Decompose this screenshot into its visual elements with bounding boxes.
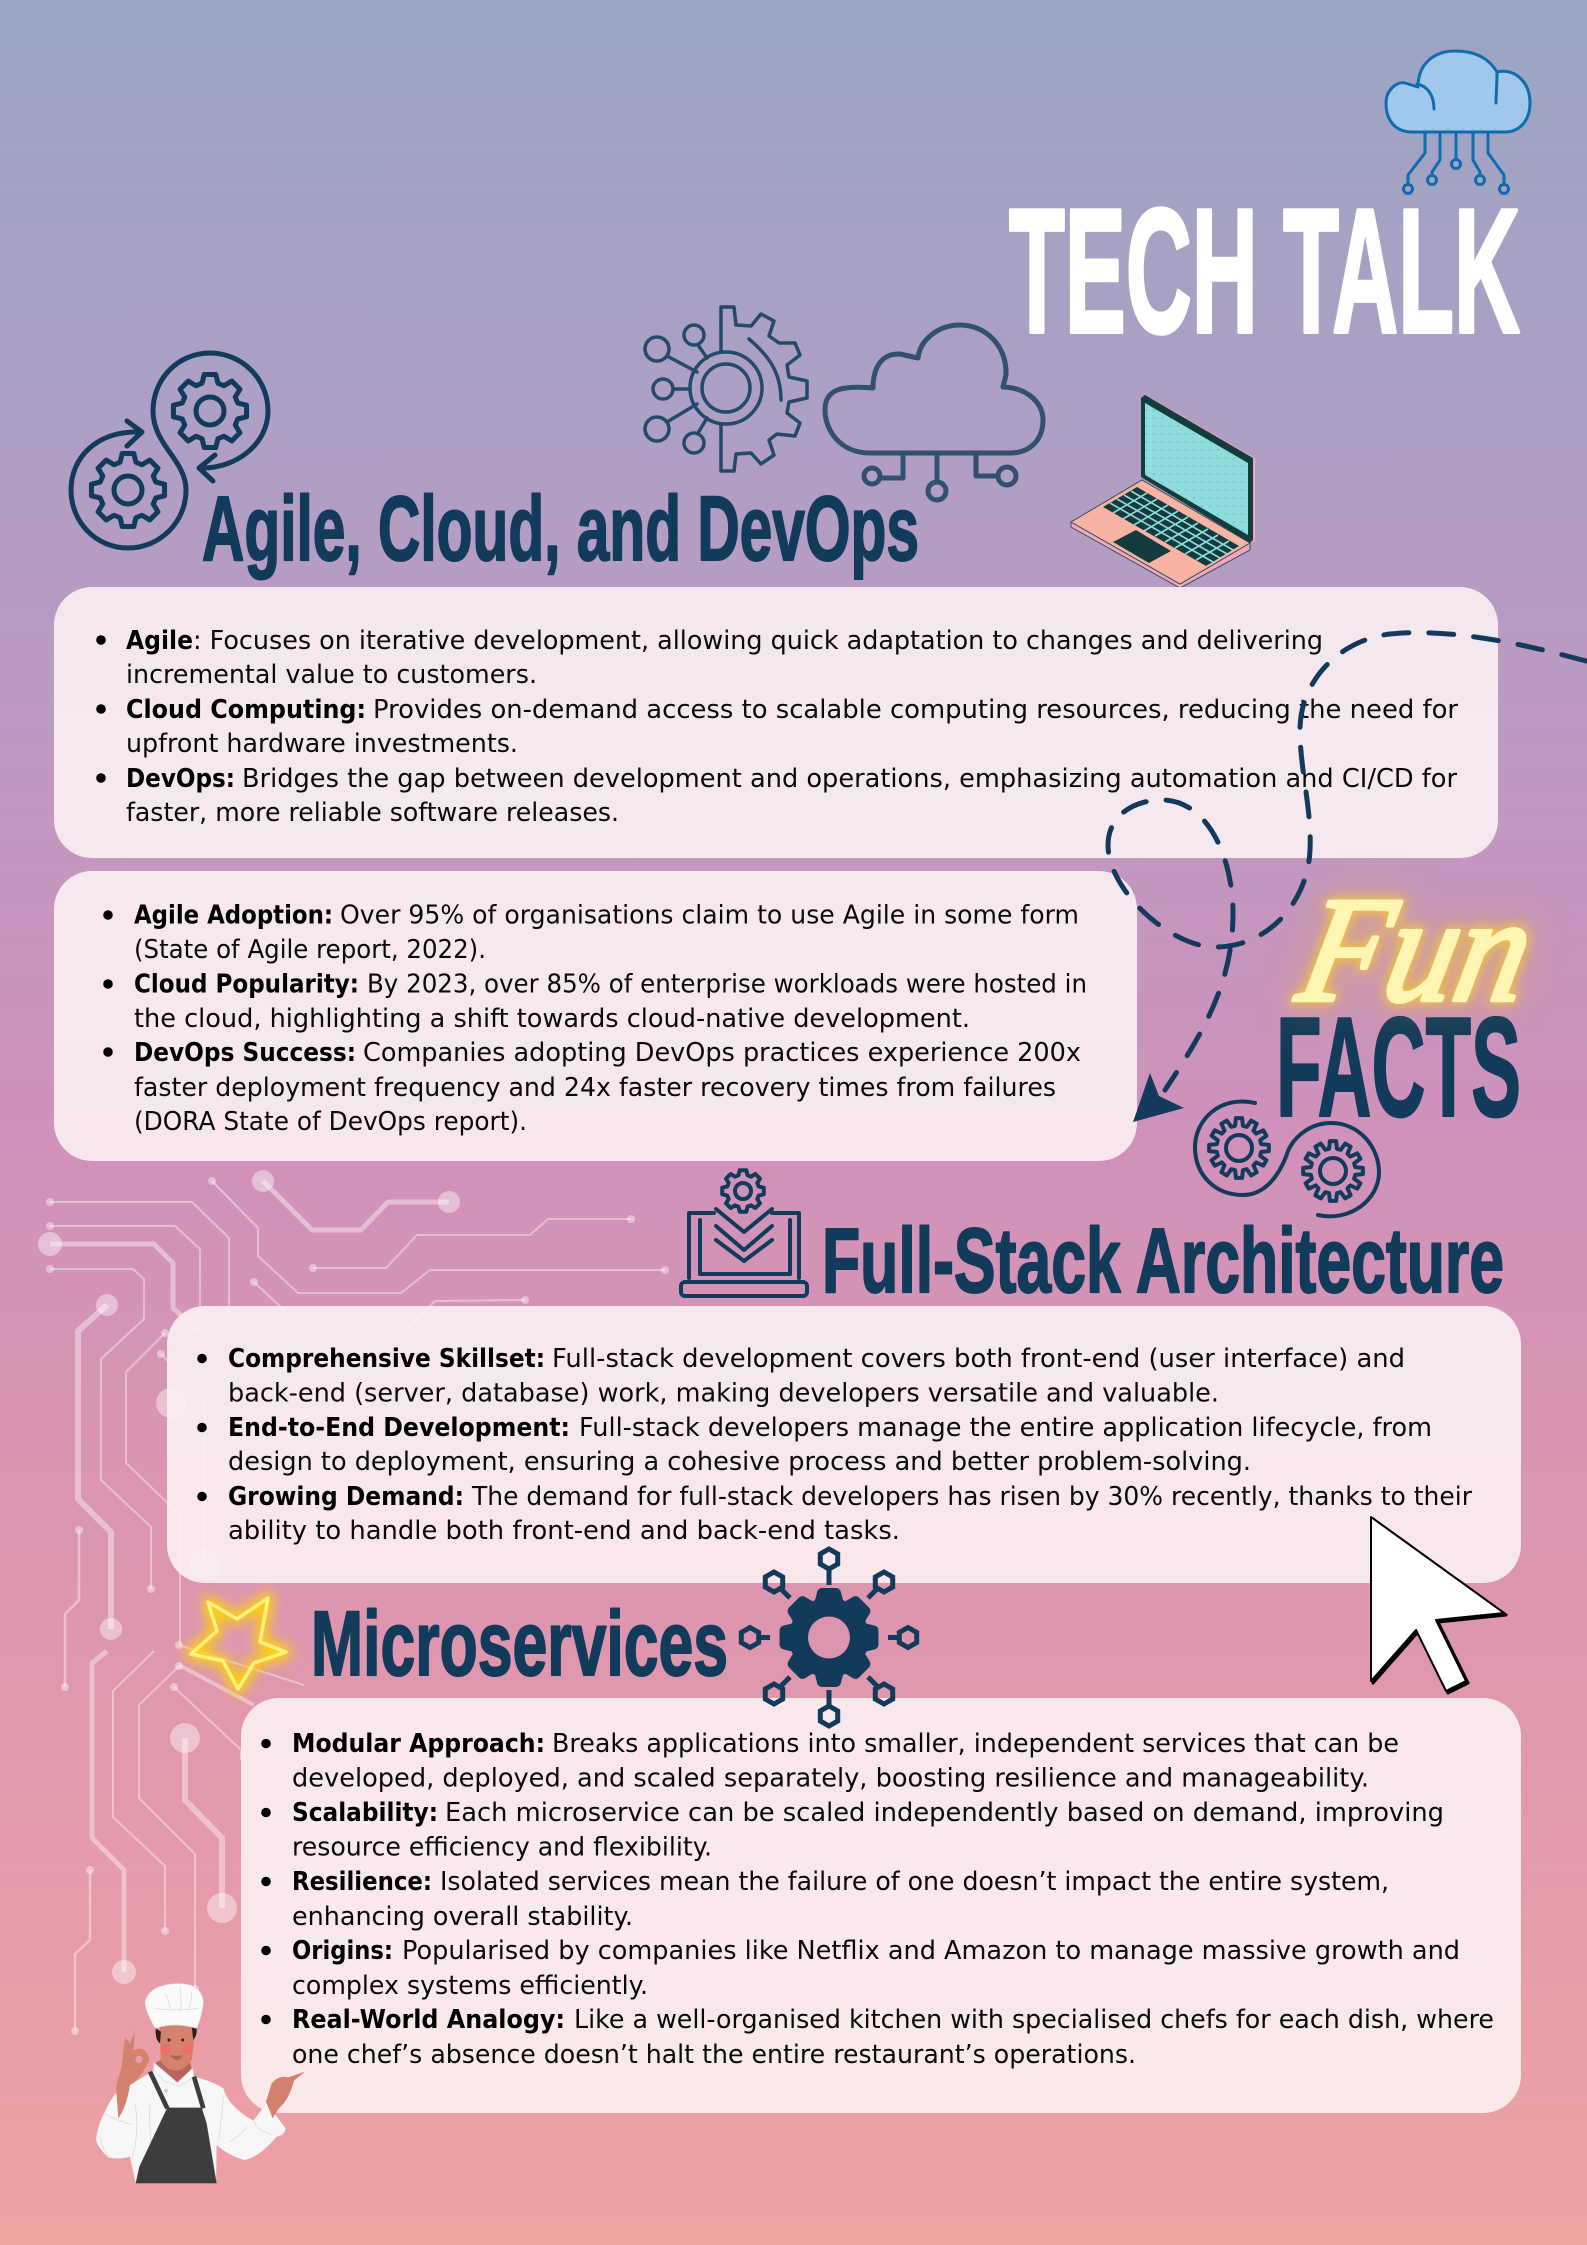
heading: Fun: Fun	[1286, 866, 1547, 1033]
text: origins: Origins:	[292, 1936, 393, 1966]
icon: laptop with gear and layers	[681, 1170, 807, 1296]
panel: agile cloud devops summary	[54, 587, 1498, 858]
text: devops success: DevOps Success:	[134, 1038, 356, 1068]
text: real-world analogy: Like a well-organised kitchen with specialised chefs for each dish, where	[574, 2005, 1494, 2035]
text: origins: complex systems efficiently.	[292, 1971, 648, 2001]
panel: fun facts list	[54, 871, 1137, 1161]
text: cloud popularity: the cloud, highlighting a shift towards cloud-native development.	[134, 1004, 970, 1034]
text: devops: DevOps:	[126, 764, 235, 794]
text: end-to-end development: End-to-End Development:	[228, 1413, 570, 1443]
icon: cloud network	[825, 325, 1043, 500]
panel: full-stack architecture points	[167, 1306, 1521, 1583]
text: agile adoption: (State of Agile report, 2022).	[134, 935, 486, 965]
text: scalability: resource efficiency and flexibility.	[292, 1833, 712, 1863]
text: comprehensive skillset: Full-stack development covers both front-end (user interface) and	[552, 1344, 1405, 1374]
heading: Agile, Cloud, and DevOps: Agile, Cloud, and DevOps	[202, 478, 919, 580]
text: devops success	[103, 1038, 1081, 1137]
icon: mouse cursor	[1371, 1517, 1506, 1693]
heading: Fun: Fun	[1286, 866, 1547, 1033]
heading: Microservices: Microservices	[311, 1593, 728, 1695]
text: resilience	[261, 1867, 1389, 1932]
text: modular approach: Modular Approach:	[292, 1729, 545, 1759]
text: growing demand: ability to handle both front-end and back-end tasks.	[228, 1516, 900, 1546]
text: agile: Agile	[126, 626, 193, 656]
text: cloud computing	[96, 695, 1458, 759]
text: agile: incremental value to customers.	[126, 660, 537, 690]
text: comprehensive skillset	[197, 1344, 1405, 1408]
icon: neon star	[191, 1598, 286, 1689]
text: devops success: (DORA State of DevOps report).	[134, 1107, 527, 1137]
icon: half gear with nodes	[645, 307, 807, 471]
heading: Fun: Fun	[1286, 866, 1547, 1033]
text: agile: : Focuses on iterative development, allowing quick adaptation to changes and delivering	[193, 626, 1323, 656]
text: comprehensive skillset: Comprehensive Skillset:	[228, 1344, 545, 1374]
text: growing demand: The demand for full-stack developers has risen by 30% recently, thanks to their	[471, 1482, 1472, 1512]
icon: solid gear with nodes	[741, 1549, 917, 1726]
text: resilience: Isolated services mean the failure of one doesn’t impact the entire system,	[440, 1867, 1389, 1897]
text: origins	[261, 1936, 1460, 2001]
text: agile adoption: Agile Adoption:	[134, 900, 333, 930]
text: resilience: enhancing overall stability.	[292, 1902, 633, 1932]
text: agile adoption: Over 95% of organisations claim to use Agile in some form	[340, 900, 1079, 930]
text: real-world analogy: Real-World Analogy:	[292, 2005, 565, 2035]
text: cloud popularity: By 2023, over 85% of enterprise workloads were hosted in	[367, 970, 1087, 1000]
text: devops success: faster deployment frequency and 24x faster recovery times from failures	[134, 1073, 1056, 1103]
text: scalability: Scalability:	[292, 1798, 438, 1828]
panel: microservices points	[241, 1698, 1521, 2113]
text: devops: Bridges the gap between development and operations, emphasizing automation and CI/CD for	[242, 764, 1457, 794]
text: modular approach: Breaks applications into smaller, independent services that can be	[552, 1729, 1399, 1759]
text: comprehensive skillset: back-end (server, database) work, making developers versatile and valuable.	[228, 1378, 1219, 1408]
text: devops: faster, more reliable software releases.	[126, 798, 619, 828]
text: growing demand	[197, 1482, 1472, 1546]
text: cloud popularity	[103, 970, 1087, 1034]
icon: gear swirl	[1195, 1101, 1379, 1216]
arrow: dashed looping arrow	[1108, 633, 1586, 1122]
text: real-world analogy: one chef’s absence doesn’t halt the entire restaurant’s operations.	[292, 2040, 1136, 2070]
text: cloud computing: Provides on-demand access to scalable computing resources, reducing the need for	[373, 695, 1458, 725]
text: origins: Popularised by companies like Netflix and Amazon to manage massive growth and	[402, 1936, 1460, 1966]
text: scalability: Each microservice can be scaled independently based on demand, improving	[445, 1798, 1444, 1828]
text: cloud computing: Cloud Computing:	[126, 695, 366, 725]
text: resilience: Resilience:	[292, 1867, 432, 1897]
text: cloud popularity: Cloud Popularity:	[134, 970, 359, 1000]
icon: two gears with cycle arrows	[71, 353, 268, 548]
icon: laptop	[1071, 395, 1255, 588]
text: end-to-end development	[197, 1413, 1432, 1477]
text: end-to-end development: design to deployment, ensuring a cohesive process and better problem-solving.	[228, 1447, 1251, 1477]
text: modular approach: developed, deployed, and scaled separately, boosting resilience and manageability.	[292, 1764, 1369, 1794]
text: real-world analogy	[261, 2005, 1494, 2070]
text: scalability	[261, 1798, 1444, 1863]
text: agile adoption	[103, 900, 1079, 965]
text: cloud computing: upfront hardware investments.	[126, 729, 518, 759]
text: devops success: Companies adopting DevOps practices experience 200x	[363, 1038, 1081, 1068]
text: modular approach	[261, 1729, 1399, 1794]
text: growing demand: Growing Demand:	[228, 1482, 464, 1512]
text: devops	[96, 764, 1457, 828]
icon: chef character	[96, 1984, 305, 2183]
text: end-to-end development: Full-stack developers manage the entire application lifecycle, from	[579, 1413, 1432, 1443]
icon: cloud with circuit lines	[1386, 51, 1530, 194]
text: agile	[96, 626, 1323, 690]
